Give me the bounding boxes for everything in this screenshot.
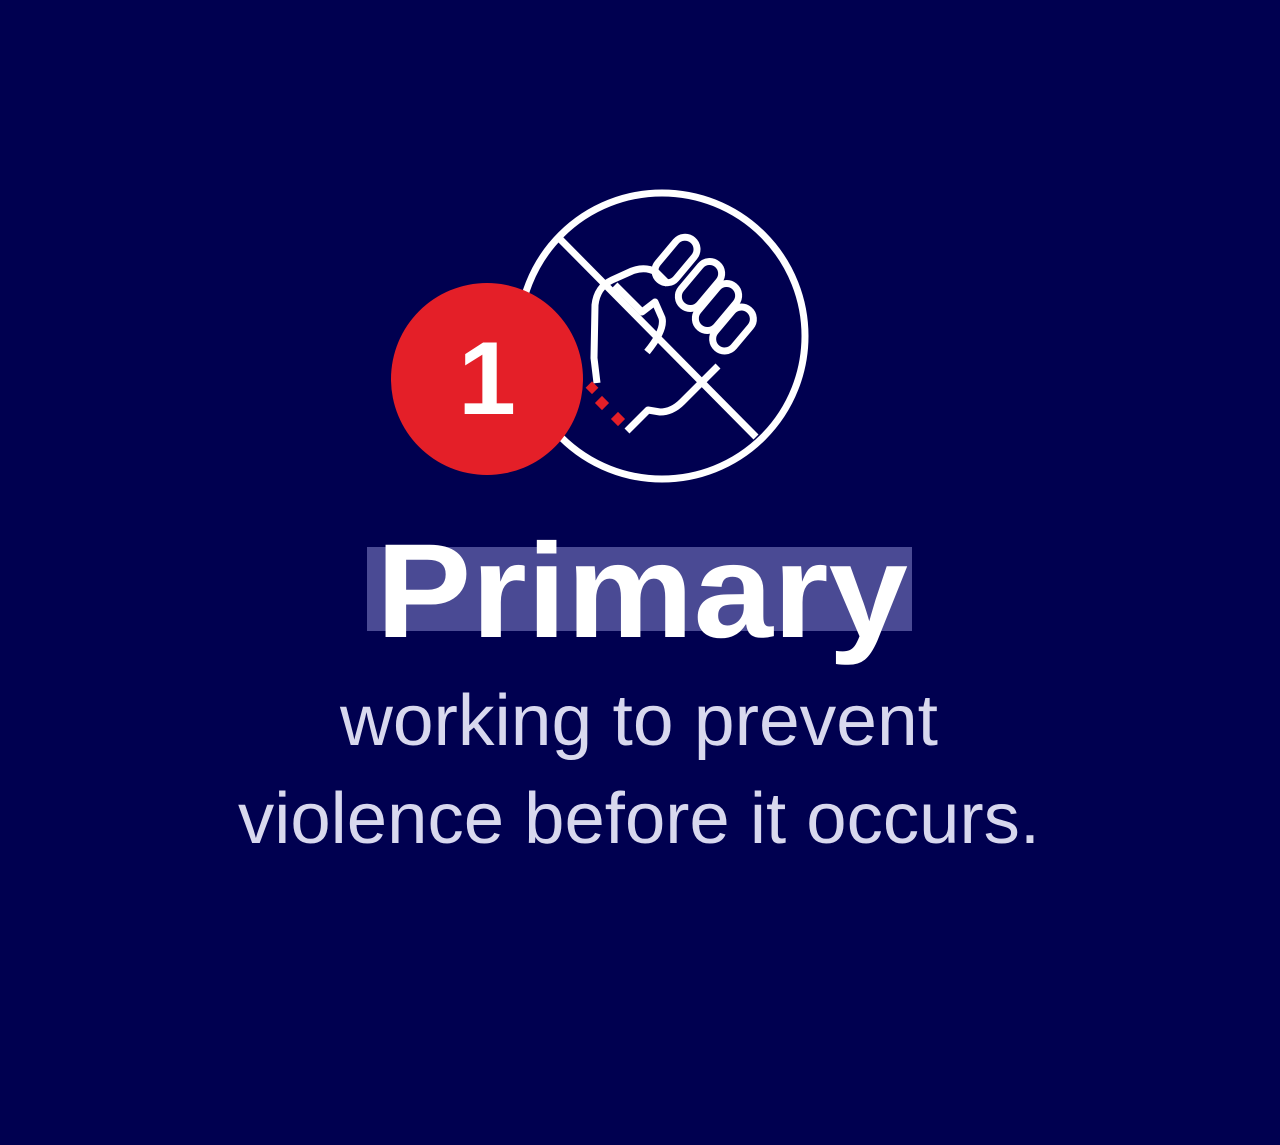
heading: Primary: Primary [376,517,908,666]
heading highlight [367,547,912,631]
red number badge [391,283,625,475]
red number badge: 1 [458,321,516,437]
subtitle: working to prevent [339,681,938,761]
subtitle: violence before it occurs. [238,779,1040,859]
icon: no violence fist [519,193,805,479]
subtitle [238,681,1040,859]
